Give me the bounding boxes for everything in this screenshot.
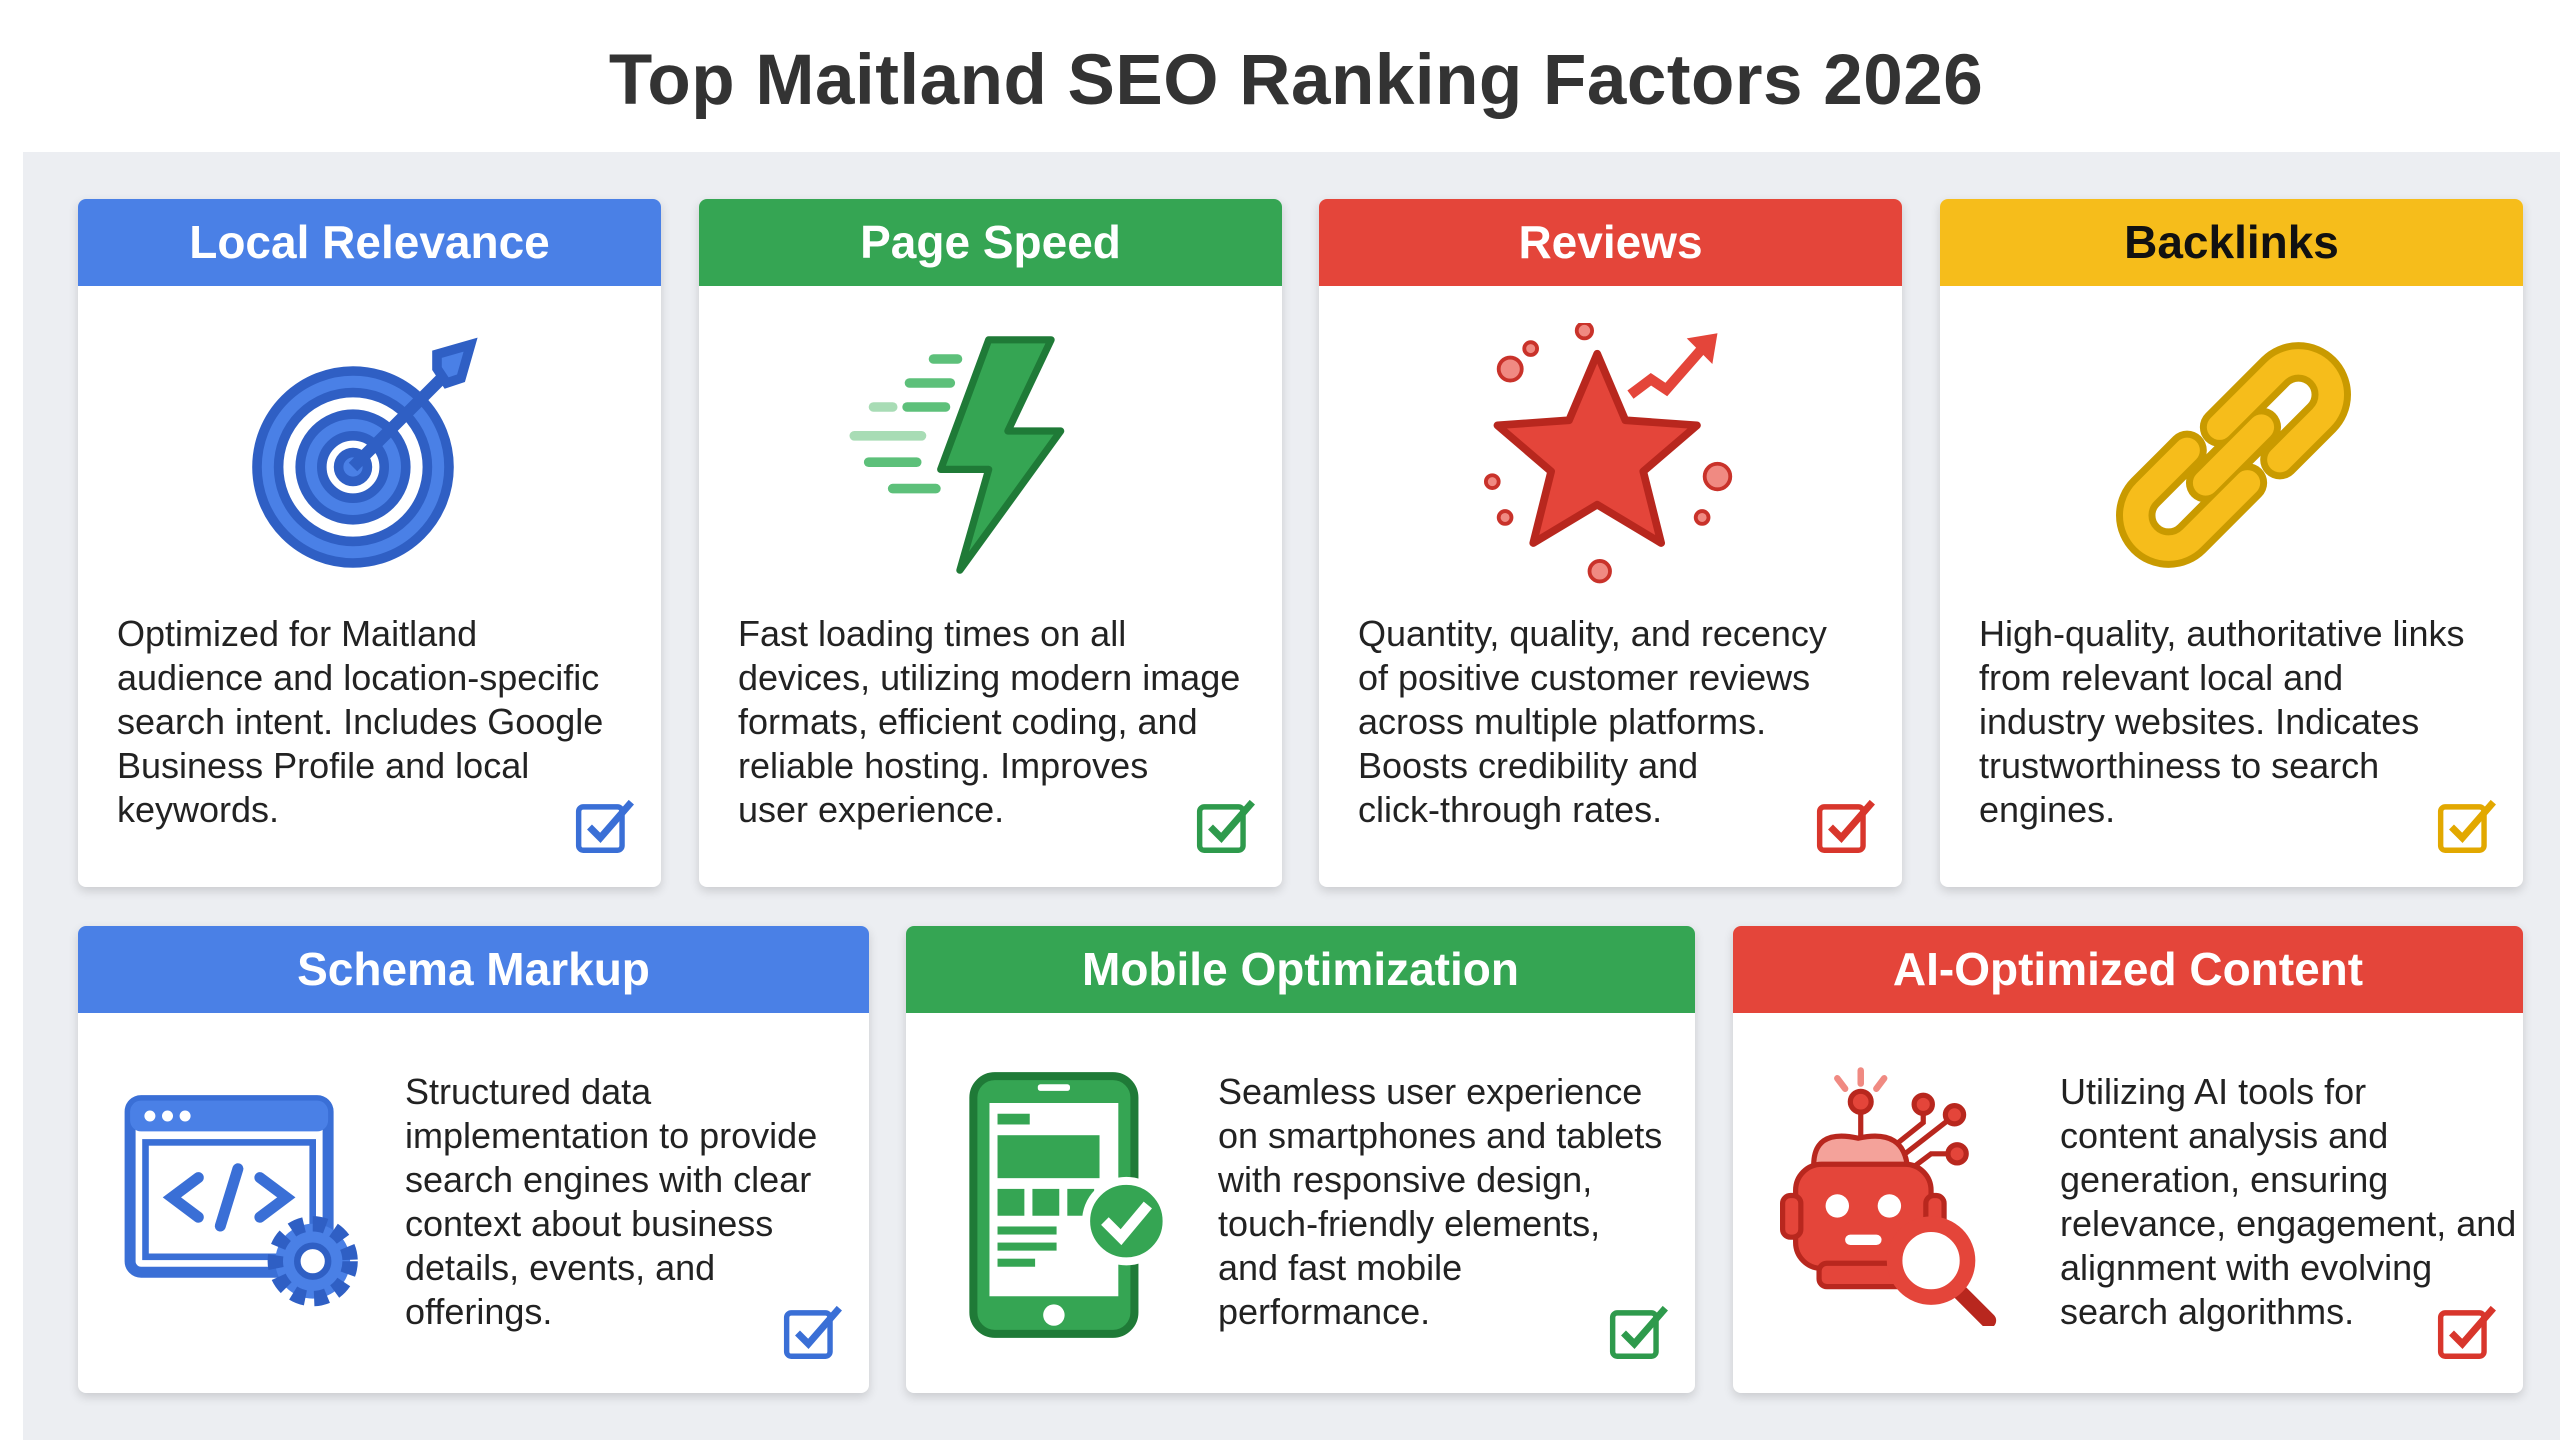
text: ai-optimized content: relevance, engagement, and <box>2060 1203 2516 1244</box>
icon: check <box>1816 800 1875 853</box>
text: ai-optimized content: search algorithms. <box>2060 1291 2354 1332</box>
text: mobile optimization: on smartphones and tablets <box>1218 1115 1662 1156</box>
icon: check <box>1610 1306 1668 1359</box>
icon: check <box>2438 800 2496 853</box>
text: page speed <box>738 613 1240 830</box>
heading: mobile optimization <box>906 926 1695 1013</box>
icon: check <box>2438 1306 2496 1359</box>
text: reviews: across multiple platforms. <box>1358 701 1766 742</box>
text: backlinks: High-quality, authoritative links <box>1979 613 2465 654</box>
heading: ai-optimized content <box>1733 926 2523 1013</box>
heading: page speed <box>699 199 1282 286</box>
text: backlinks: trustworthiness to search <box>1979 745 2379 786</box>
text: ai-optimized content: Utilizing AI tools for <box>2060 1071 2366 1112</box>
heading: reviews: Reviews <box>1518 216 1703 268</box>
panel: ai-optimized content <box>1733 926 2523 1393</box>
heading: local relevance <box>78 199 661 286</box>
icon: target <box>252 338 478 568</box>
text: schema markup: implementation to provide <box>405 1115 817 1156</box>
text: local relevance: Optimized for Maitland <box>117 613 477 654</box>
text: schema markup: Structured data <box>405 1071 651 1112</box>
panel: schema markup <box>78 926 869 1393</box>
text: local relevance: audience and location-specific <box>117 657 599 698</box>
text: backlinks: industry websites. Indicates <box>1979 701 2419 742</box>
title: Top Maitland SEO Ranking Factors 2026 <box>609 41 1983 120</box>
heading: mobile optimization: Mobile Optimization <box>1082 943 1519 995</box>
text: reviews: of positive customer reviews <box>1358 657 1810 698</box>
icon: chain link <box>2116 342 2351 568</box>
text: page speed: Fast loading times on all <box>738 613 1126 654</box>
icon: lightning <box>850 336 1064 574</box>
text: mobile optimization <box>1218 1071 1662 1332</box>
text: schema markup: details, events, and <box>405 1247 715 1288</box>
text: reviews: Quantity, quality, and recency <box>1358 613 1827 654</box>
heading: reviews <box>1319 199 1902 286</box>
icon: phone with check <box>969 1072 1163 1338</box>
text: schema markup: search engines with clear <box>405 1159 811 1200</box>
panel: reviews <box>1319 199 1902 887</box>
heading: local relevance: Local Relevance <box>189 216 550 268</box>
heading: schema markup: Schema Markup <box>297 943 650 995</box>
text: mobile optimization: with responsive design, <box>1218 1159 1592 1200</box>
text: page speed: devices, utilizing modern image <box>738 657 1240 698</box>
text: ai-optimized content: alignment with evolving <box>2060 1247 2432 1288</box>
heading: backlinks <box>1940 199 2523 286</box>
text: mobile optimization: Seamless user experience <box>1218 1071 1642 1112</box>
text: backlinks: from relevant local and <box>1979 657 2343 698</box>
icon: robot brain with magnifier <box>1780 1067 1996 1326</box>
icon: check <box>576 800 634 853</box>
text: mobile optimization: touch-friendly elements, <box>1218 1203 1600 1244</box>
text: page speed: reliable hosting. Improves <box>738 745 1148 786</box>
text: backlinks: engines. <box>1979 789 2115 830</box>
heading: ai-optimized content: AI-Optimized Content <box>1893 943 2363 995</box>
panel: page speed <box>699 199 1282 887</box>
text: local relevance: search intent. Includes Google <box>117 701 603 742</box>
panel: mobile optimization <box>906 926 1695 1393</box>
icon: code window with gear <box>124 1095 358 1306</box>
text: schema markup: offerings. <box>405 1291 552 1332</box>
text: ai-optimized content <box>2060 1071 2516 1332</box>
text: ai-optimized content: generation, ensuring <box>2060 1159 2388 1200</box>
text: local relevance: keywords. <box>117 789 279 830</box>
heading: schema markup <box>78 926 869 1013</box>
text: local relevance: Business Profile and local <box>117 745 529 786</box>
text: reviews: click-through rates. <box>1358 789 1662 830</box>
text: reviews: Boosts credibility and <box>1358 745 1698 786</box>
text: mobile optimization: performance. <box>1218 1291 1430 1332</box>
icon: check <box>784 1306 842 1359</box>
text: local relevance <box>117 613 603 830</box>
text: schema markup <box>405 1071 817 1332</box>
text: ai-optimized content: content analysis and <box>2060 1115 2388 1156</box>
text: reviews <box>1358 613 1827 830</box>
icon: check <box>1196 800 1255 853</box>
text: mobile optimization: and fast mobile <box>1218 1247 1462 1288</box>
text: page speed: formats, efficient coding, and <box>738 701 1198 742</box>
text: page speed: user experience. <box>738 789 1004 830</box>
heading: backlinks: Backlinks <box>2124 216 2339 268</box>
text: backlinks <box>1979 613 2465 830</box>
panel: local relevance <box>78 199 661 887</box>
heading: page speed: Page Speed <box>860 216 1121 268</box>
panel: backlinks <box>1940 199 2523 887</box>
text: schema markup: context about business <box>405 1203 773 1244</box>
icon: star <box>1484 323 1732 584</box>
